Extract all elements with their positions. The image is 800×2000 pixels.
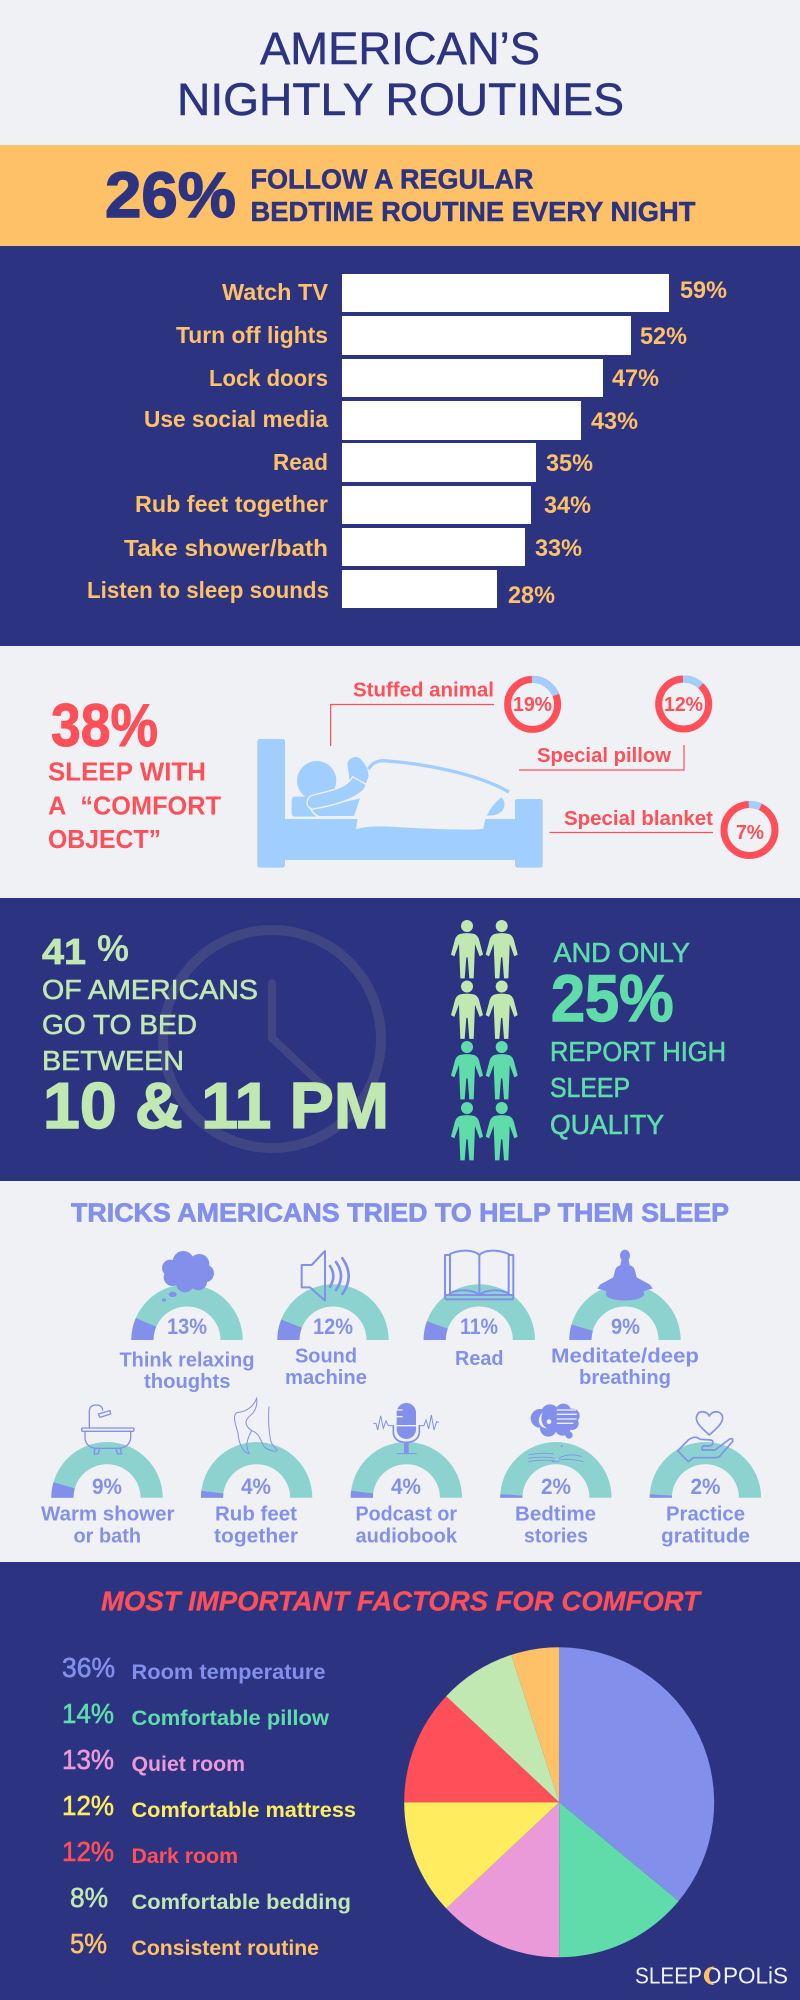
bar: Take shower/bath 33% bbox=[124, 528, 582, 566]
bar: Take shower/bath 33%: 33% bbox=[535, 535, 582, 562]
text: sleep with a comfort object: SLEEP WITH bbox=[48, 756, 206, 786]
callout: special pillow 12% bbox=[519, 679, 709, 770]
bar: Listen to sleep sounds 28%: 28% bbox=[508, 582, 555, 609]
panel: bedtime and sleep quality bbox=[0, 898, 800, 1181]
text: and only 25% report high sleep quality: AND ONLY bbox=[554, 937, 690, 968]
callout: special pillow 12%: Special pillow bbox=[537, 744, 671, 767]
text: 41% of Americans go to bed between bbox=[42, 928, 389, 1142]
text: 41% of Americans go to bed between: % bbox=[97, 928, 129, 969]
heading: tricks: TRICKS AMERICANS TRIED TO HELP THEM SLEEP bbox=[71, 1198, 729, 1228]
trick: rub feet together 4%: 4% bbox=[241, 1474, 271, 1499]
trick: think relaxing thoughts 13%: thoughts bbox=[144, 1370, 230, 1393]
pie chart: comfort factors bbox=[404, 1647, 714, 1957]
trick: rub feet together 4%: Rub feet bbox=[215, 1502, 297, 1526]
bar: Turn off lights 52%: 52% bbox=[640, 323, 687, 350]
legend row: room temperature: Room temperature bbox=[132, 1661, 326, 1684]
bar: Use social media 43%: 43% bbox=[591, 408, 638, 435]
stat: 26%: 26% bbox=[105, 159, 236, 231]
legend row: consistent routine: Consistent routine bbox=[132, 1937, 319, 1960]
trick: read 11%: Read bbox=[455, 1347, 504, 1370]
icon: clock bbox=[163, 930, 381, 1148]
text: and only 25% report high sleep quality bbox=[550, 937, 726, 1140]
icon: microphone bbox=[373, 1403, 439, 1454]
icon: meditating figure bbox=[597, 1250, 653, 1300]
bar: Rub feet together 34%: Rub feet together bbox=[135, 491, 328, 517]
trick: bedtime stories 2%: stories bbox=[524, 1524, 588, 1548]
callout: special pillow 12%: 12% bbox=[664, 694, 703, 716]
icon: speaker bbox=[302, 1251, 349, 1301]
text: regular bedtime routine bbox=[250, 164, 696, 227]
legend row: comfortable pillow: Comfortable pillow bbox=[132, 1707, 330, 1730]
icon: person in bed bbox=[257, 739, 543, 868]
trick: podcast or audiobook 4%: Podcast or bbox=[356, 1502, 457, 1526]
trick: bedtime stories 2% bbox=[500, 1404, 612, 1548]
legend row: quiet room bbox=[62, 1744, 245, 1776]
trick: podcast or audiobook 4% bbox=[351, 1403, 462, 1548]
bar: Use social media 43%: Use social media bbox=[144, 406, 329, 432]
trick: think relaxing thoughts 13%: 13% bbox=[167, 1314, 207, 1339]
icon: people, 25% highlighted bbox=[451, 920, 518, 1160]
legend row: consistent routine: 5% bbox=[70, 1928, 107, 1959]
icon: feet bbox=[234, 1398, 277, 1453]
bar: Lock doors 47%: 47% bbox=[612, 365, 659, 392]
callout: special blanket 7% bbox=[550, 804, 775, 856]
logo: Sleepopolis bbox=[635, 1962, 788, 1988]
heading: title text bbox=[177, 23, 624, 125]
trick: bedtime stories 2%: 2% bbox=[541, 1474, 571, 1499]
bar: Watch TV 59%: 59% bbox=[680, 277, 727, 304]
bar: Watch TV 59%: Watch TV bbox=[222, 279, 328, 305]
legend row: consistent routine bbox=[70, 1928, 319, 1960]
trick: podcast or audiobook 4%: audiobook bbox=[356, 1524, 458, 1548]
trick: sound machine 12% bbox=[277, 1251, 389, 1389]
text: 41% of Americans go to bed between: BETWEEN bbox=[42, 1045, 184, 1076]
icon: open book bbox=[445, 1251, 513, 1299]
trick: warm shower or bath 9%: or bath bbox=[74, 1524, 141, 1548]
trick: rub feet together 4%: together bbox=[214, 1524, 298, 1548]
callout: special blanket 7%: Special blanket bbox=[564, 807, 713, 830]
logo: Sleepopolis: O bbox=[704, 1962, 722, 1988]
callout: special blanket 7%: 7% bbox=[736, 822, 764, 844]
icon: hand with heart bbox=[678, 1412, 733, 1462]
bar: Take shower/bath 33%: Take shower/bath bbox=[124, 535, 328, 561]
trick: meditate or deep breathing 9%: 9% bbox=[611, 1314, 640, 1339]
legend row: comfortable bedding: 8% bbox=[70, 1882, 108, 1913]
bar: Turn off lights 52% bbox=[176, 316, 687, 355]
panel: sleep tricks bbox=[0, 1181, 800, 1562]
text: sleep with a comfort object: A “COMFORT bbox=[48, 790, 221, 820]
bar: Lock doors 47% bbox=[209, 359, 659, 397]
bar: Watch TV 59% bbox=[222, 274, 727, 312]
logo: Sleepopolis: SLEEP bbox=[635, 1962, 702, 1988]
bar: Rub feet together 34% bbox=[135, 486, 591, 524]
icon: bathtub bbox=[82, 1405, 134, 1454]
bar: Use social media 43% bbox=[144, 401, 638, 440]
text: and only 25% report high sleep quality: QUALITY bbox=[550, 1109, 664, 1140]
bar: Lock doors 47%: Lock doors bbox=[209, 365, 328, 391]
legend row: quiet room: 13% bbox=[62, 1744, 114, 1775]
text: regular bedtime routine: FOLLOW A REGULAR bbox=[250, 164, 534, 194]
bar: Turn off lights 52%: Turn off lights bbox=[176, 322, 328, 348]
bar: Rub feet together 34%: 34% bbox=[544, 492, 591, 519]
trick: think relaxing thoughts 13% bbox=[120, 1251, 254, 1393]
text: 41% of Americans go to bed between: 41 bbox=[42, 931, 86, 972]
trick: practice gratitude 2%: gratitude bbox=[661, 1524, 750, 1548]
icon: thought cloud bbox=[162, 1251, 214, 1302]
legend row: comfortable mattress: 12% bbox=[62, 1790, 114, 1821]
bar: Read 35% bbox=[273, 443, 593, 482]
text: regular bedtime routine: BEDTIME ROUTINE EVERY NIGHT bbox=[250, 196, 696, 227]
logo: Sleepopolis: POLiS bbox=[723, 1962, 788, 1988]
text: and only 25% report high sleep quality: 25% bbox=[551, 961, 674, 1035]
legend row: room temperature: 36% bbox=[62, 1652, 115, 1683]
callout: stuffed animal 19%: Stuffed animal bbox=[353, 678, 494, 702]
panel: routines bar chart bbox=[0, 246, 800, 646]
legend row: comfortable mattress bbox=[62, 1790, 356, 1822]
trick: podcast or audiobook 4%: 4% bbox=[391, 1474, 421, 1499]
text: and only 25% report high sleep quality: REPORT HIGH bbox=[550, 1036, 726, 1067]
text: and only 25% report high sleep quality: SLEEP bbox=[550, 1072, 630, 1103]
trick: rub feet together 4% bbox=[201, 1398, 312, 1548]
bar: Listen to sleep sounds 28%: Listen to sleep sounds bbox=[87, 577, 329, 603]
legend: factors bbox=[62, 1652, 356, 1960]
trick: sound machine 12%: Sound bbox=[295, 1344, 357, 1368]
legend row: room temperature bbox=[62, 1652, 326, 1684]
stat: 38%: 38% bbox=[51, 692, 158, 759]
icon: story cloud and book bbox=[528, 1404, 583, 1462]
bar: Listen to sleep sounds 28% bbox=[87, 570, 555, 609]
panel: title bbox=[0, 0, 800, 145]
heading: title text: NIGHTLY ROUTINES bbox=[177, 74, 624, 125]
text: 41% of Americans go to bed between: OF AMERICANS bbox=[42, 974, 258, 1005]
trick: meditate or deep breathing 9%: Meditate/deep bbox=[551, 1344, 699, 1368]
text: 41% of Americans go to bed between: 10 & 11 PM bbox=[43, 1069, 389, 1142]
heading: title text: AMERICAN’S bbox=[260, 23, 540, 74]
trick: warm shower or bath 9%: 9% bbox=[92, 1474, 122, 1499]
callout: stuffed animal 19% bbox=[331, 678, 558, 746]
trick: read 11%: 11% bbox=[460, 1314, 498, 1339]
panel: comfort factors bbox=[0, 1562, 800, 2000]
text: 41% of Americans go to bed between: GO TO BED bbox=[42, 1009, 197, 1040]
legend row: comfortable mattress: Comfortable mattress bbox=[132, 1799, 356, 1822]
trick: sound machine 12%: 12% bbox=[313, 1314, 353, 1339]
trick: practice gratitude 2%: 2% bbox=[690, 1474, 720, 1499]
trick: think relaxing thoughts 13%: Think relaxing bbox=[120, 1348, 254, 1372]
legend row: quiet room: Quiet room bbox=[132, 1753, 245, 1776]
trick: bedtime stories 2%: Bedtime bbox=[515, 1502, 596, 1526]
trick: practice gratitude 2% bbox=[650, 1412, 761, 1548]
panel: comfort object bbox=[0, 646, 800, 898]
bar: Read 35%: Read bbox=[273, 449, 328, 475]
trick: meditate or deep breathing 9%: breathing bbox=[579, 1366, 671, 1389]
panel: 26% banner bbox=[0, 145, 800, 246]
legend row: comfortable pillow bbox=[62, 1698, 330, 1730]
trick: warm shower or bath 9% bbox=[41, 1405, 175, 1548]
callout: stuffed animal 19%: 19% bbox=[513, 694, 552, 716]
trick: sound machine 12%: machine bbox=[285, 1366, 367, 1389]
legend row: comfortable bedding bbox=[70, 1882, 351, 1914]
legend row: comfortable pillow: 14% bbox=[62, 1698, 114, 1729]
trick: warm shower or bath 9%: Warm shower bbox=[41, 1502, 175, 1526]
legend row: dark room: 12% bbox=[62, 1836, 114, 1867]
trick: meditate or deep breathing 9% bbox=[551, 1250, 699, 1389]
trick: practice gratitude 2%: Practice bbox=[666, 1502, 745, 1526]
trick: read 11% bbox=[424, 1251, 535, 1370]
text: sleep with a comfort object bbox=[48, 756, 221, 854]
text: sleep with a comfort object: OBJECT” bbox=[48, 824, 161, 854]
legend row: dark room: Dark room bbox=[132, 1845, 238, 1868]
legend row: comfortable bedding: Comfortable bedding bbox=[132, 1891, 351, 1914]
legend row: dark room bbox=[62, 1836, 238, 1868]
bar: Read 35%: 35% bbox=[546, 450, 593, 477]
heading: comfort factors: MOST IMPORTANT FACTORS FOR COMFORT bbox=[101, 1586, 703, 1616]
